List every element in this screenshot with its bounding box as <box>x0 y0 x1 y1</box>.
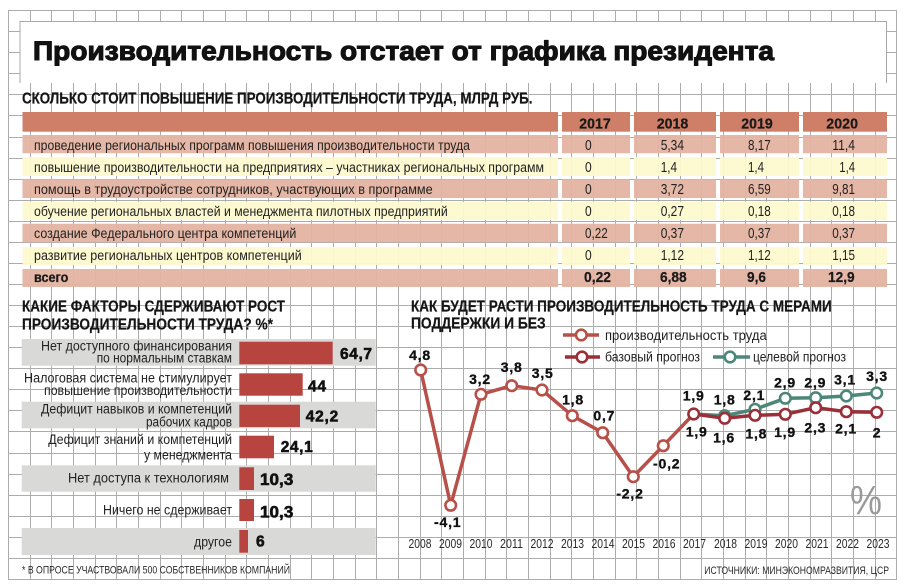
footnote: * В ОПРОСЕ УЧАСТВОВАЛИ 500 СОБСТВЕННИКОВ КОМПАНИЙ <box>22 563 290 576</box>
table header row <box>22 112 887 132</box>
bar labels <box>24 339 232 550</box>
series: target forecast <box>694 388 882 421</box>
heading: factors: КАКИЕ ФАКТОРЫ СДЕРЖИВАЮТ РОСТ <box>22 299 285 316</box>
table values: 11,4 <box>832 138 855 154</box>
data labels: 3,5 <box>532 365 554 381</box>
table values: 0,37 <box>661 226 684 242</box>
table values: 8,17 <box>748 138 771 154</box>
table values: 1,4 <box>748 160 764 176</box>
heading: line chart <box>411 299 832 333</box>
table values: 1,12 <box>661 248 684 264</box>
x axis years: 2023 <box>866 537 890 551</box>
legend: target forecast: целевой прогноз <box>753 350 846 365</box>
heading: factors <box>22 299 285 333</box>
legend: productivity: производительность труда <box>605 328 767 343</box>
x axis years: 2019 <box>744 537 768 551</box>
table values: 0 <box>585 138 592 154</box>
table values: 0,37 <box>748 226 771 242</box>
bar values <box>256 346 372 551</box>
table values: 0,18 <box>748 204 771 220</box>
bar labels: Ничего не сдерживает <box>103 503 232 518</box>
x axis years: 2017 <box>683 537 706 551</box>
bar labels: у менеджмента <box>144 447 232 462</box>
bar labels: Налоговая система не стимулирует <box>24 370 232 385</box>
data labels: 2,1 <box>743 387 765 403</box>
x axis years: 2016 <box>652 537 676 551</box>
table row labels: проведение региональных программ повышения производительности труда <box>34 138 470 153</box>
panel: cost table <box>22 112 887 287</box>
x axis years <box>408 537 890 551</box>
bar labels: другое <box>194 535 232 550</box>
table values: 5,34 <box>661 138 684 154</box>
legend: base forecast <box>565 350 700 365</box>
data labels: -0,2 <box>653 455 680 471</box>
bar labels: рабочих кадров <box>146 415 232 430</box>
data labels: 1,9 <box>683 388 705 404</box>
table row labels: повышение производительности на предприятиях – участниках региональных программ <box>34 160 544 175</box>
table values: 1,15 <box>832 248 855 264</box>
x axis years: 2012 <box>530 537 554 551</box>
bar values: 6 <box>256 534 265 551</box>
table values: 12,9 <box>828 270 855 286</box>
table values: 3,72 <box>661 182 684 198</box>
legend: base forecast: базовый прогноз <box>605 350 700 365</box>
table header row: 2017 <box>579 116 611 132</box>
bar chart: factors <box>22 339 376 555</box>
bar labels: Дефицит навыков и компетенций <box>41 401 232 416</box>
bar values: 10,3 <box>260 502 293 521</box>
table row backgrounds <box>22 135 887 287</box>
table row labels: создание Федерального центра компетенций <box>34 226 296 241</box>
table values: 9,81 <box>832 182 855 198</box>
row backgrounds <box>22 339 376 555</box>
line chart <box>408 347 890 551</box>
data labels: 1,8 <box>745 425 767 441</box>
bar values: 10,3 <box>260 470 293 489</box>
x axis years: 2011 <box>500 537 523 551</box>
bar labels: повышение производительности <box>44 383 232 398</box>
data labels: 1,8 <box>714 391 736 407</box>
bar values: 42,2 <box>306 409 338 426</box>
bars <box>239 342 333 553</box>
table values: 0 <box>585 160 592 176</box>
table row labels: обучение региональных властей и менеджмента пилотных предприятий <box>34 204 448 219</box>
table row labels: развитие региональных центров компетенций <box>34 248 302 263</box>
data labels: 2,1 <box>835 420 857 436</box>
legend: target forecast <box>713 350 846 365</box>
bar values: 64,7 <box>340 346 372 363</box>
table values: 0 <box>585 204 592 220</box>
table row labels <box>34 138 544 285</box>
data labels: -2,2 <box>616 485 644 501</box>
table header row: 2019 <box>741 116 773 132</box>
x axis years: 2014 <box>592 537 615 551</box>
table values <box>584 138 855 286</box>
table values: 0,18 <box>832 204 855 220</box>
table row labels: всего <box>34 270 68 285</box>
bar labels: Нет доступа к технологиям <box>68 471 229 486</box>
series: productivity <box>415 365 694 511</box>
data labels: 2,9 <box>804 374 826 390</box>
data labels: 1,8 <box>562 391 584 407</box>
data labels: 3,2 <box>469 371 491 387</box>
table values: 0,22 <box>585 226 608 242</box>
table values: 1,4 <box>661 160 677 176</box>
data labels <box>409 347 888 530</box>
table values: 6,59 <box>748 182 771 198</box>
data labels: 0,7 <box>593 408 615 424</box>
data labels: -4,1 <box>434 514 461 530</box>
title: Производительность отстает от графика президента <box>33 36 775 66</box>
data labels: 2 <box>873 425 881 441</box>
data labels: 2,9 <box>774 374 796 390</box>
data labels: 3,8 <box>501 359 523 375</box>
data labels: 4,8 <box>409 347 431 363</box>
data labels: 3,3 <box>866 368 888 384</box>
x axis years: 2018 <box>714 537 737 551</box>
percent sign: % <box>850 478 882 524</box>
data labels: 1,9 <box>686 423 708 439</box>
table header row: 2018 <box>657 116 688 132</box>
data labels: 1,9 <box>774 424 796 440</box>
x axis years: 2010 <box>470 537 493 551</box>
heading: line chart: КАК БУДЕТ РАСТИ ПРОИЗВОДИТЕЛЬНОСТЬ ТРУДА С МЕРАМИ <box>411 299 832 316</box>
legend <box>563 328 846 365</box>
table values: 0 <box>585 248 592 264</box>
bar labels: по нормальным ставкам <box>97 350 232 366</box>
table values: 0 <box>585 182 592 198</box>
x axis years: 2021 <box>806 537 829 551</box>
data labels: 1,6 <box>713 430 735 446</box>
x axis years: 2008 <box>408 537 432 551</box>
bar values: 24,1 <box>281 439 313 456</box>
bar labels: Дефицит знаний и компетенций <box>48 432 232 447</box>
data labels: 3,1 <box>834 371 856 387</box>
x axis years: 2009 <box>439 537 462 551</box>
table values: 0,37 <box>832 226 855 242</box>
table values: 0,27 <box>661 204 684 220</box>
heading: table: СКОЛЬКО СТОИТ ПОВЫШЕНИЕ ПРОИЗВОДИТЕЛЬНОСТИ ТРУДА, МЛРД РУБ. <box>22 90 532 107</box>
heading: factors: ПРОИЗВОДИТЕЛЬНОСТИ ТРУДА? %* <box>22 316 274 333</box>
data labels: 2,3 <box>804 419 826 435</box>
x axis years: 2013 <box>561 537 584 551</box>
table header row: 2020 <box>826 116 858 132</box>
bar values: 44 <box>308 379 326 396</box>
x axis years: 2020 <box>775 537 798 551</box>
table values: 1,12 <box>748 248 771 264</box>
table values: 1,4 <box>839 160 855 176</box>
bar labels: Нет доступного финансирования <box>41 339 232 354</box>
table values: 0,22 <box>584 270 611 286</box>
x axis years: 2015 <box>622 537 645 551</box>
table row labels: помощь в трудоустройстве сотрудников, участвующих в программе <box>34 182 433 197</box>
table values: 9,6 <box>747 270 766 286</box>
series: base forecast <box>688 402 882 424</box>
x axis years: 2022 <box>836 537 859 551</box>
title panel <box>20 22 886 83</box>
heading: line chart: ПОДДЕРЖКИ И БЕЗ <box>411 316 546 333</box>
table values: 6,88 <box>660 270 687 286</box>
